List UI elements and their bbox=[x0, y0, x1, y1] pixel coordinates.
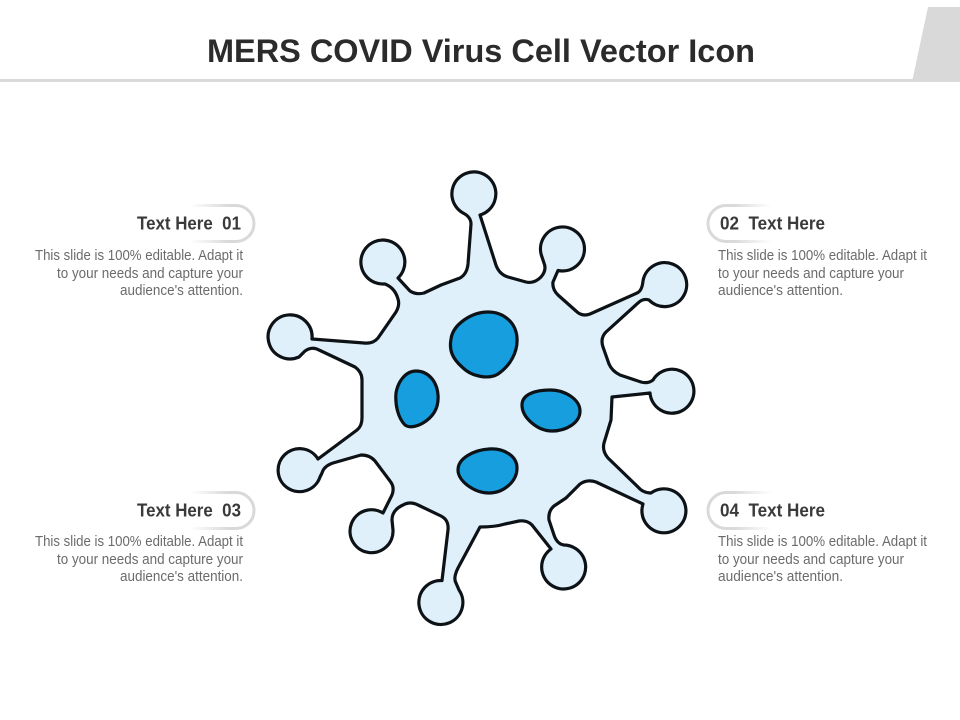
heading: Text Here 03 bbox=[137, 500, 241, 520]
description bbox=[35, 533, 244, 585]
header band bbox=[0, 7, 960, 82]
callout 03 bbox=[35, 492, 254, 585]
description: This slide is 100% editable. Adapt it bbox=[35, 247, 244, 264]
virus cell icon bbox=[268, 172, 694, 624]
description bbox=[718, 533, 928, 585]
callout 04 bbox=[708, 492, 928, 585]
heading: 04 Text Here bbox=[720, 500, 825, 520]
description: to your needs and capture your bbox=[718, 265, 904, 282]
description: audience's attention. bbox=[718, 568, 843, 585]
description: to your needs and capture your bbox=[57, 265, 243, 282]
title: MERS COVID Virus Cell Vector Icon bbox=[207, 33, 755, 69]
nucleus: top bbox=[450, 312, 517, 377]
description: This slide is 100% editable. Adapt it bbox=[718, 247, 928, 264]
pill outline bbox=[190, 492, 254, 528]
pill outline bbox=[708, 206, 772, 242]
callout 01 bbox=[35, 206, 254, 299]
pill outline bbox=[708, 492, 772, 528]
description: to your needs and capture your bbox=[718, 551, 904, 568]
description: audience's attention. bbox=[120, 282, 243, 299]
virus body with spikes bbox=[268, 172, 694, 624]
description: This slide is 100% editable. Adapt it bbox=[35, 533, 244, 550]
description bbox=[35, 247, 244, 299]
heading: Text Here 01 bbox=[137, 212, 241, 234]
callout 02 bbox=[708, 206, 928, 299]
pill outline bbox=[190, 206, 254, 242]
description: audience's attention. bbox=[718, 282, 843, 299]
nucleus: left bbox=[396, 371, 438, 427]
heading: 02 Text Here bbox=[720, 212, 825, 234]
description bbox=[718, 247, 928, 299]
description: This slide is 100% editable. Adapt it bbox=[718, 533, 928, 550]
nucleus: bottom bbox=[458, 449, 517, 493]
nucleus: right bbox=[522, 390, 580, 431]
description: to your needs and capture your bbox=[57, 551, 243, 568]
description: audience's attention. bbox=[120, 568, 243, 585]
